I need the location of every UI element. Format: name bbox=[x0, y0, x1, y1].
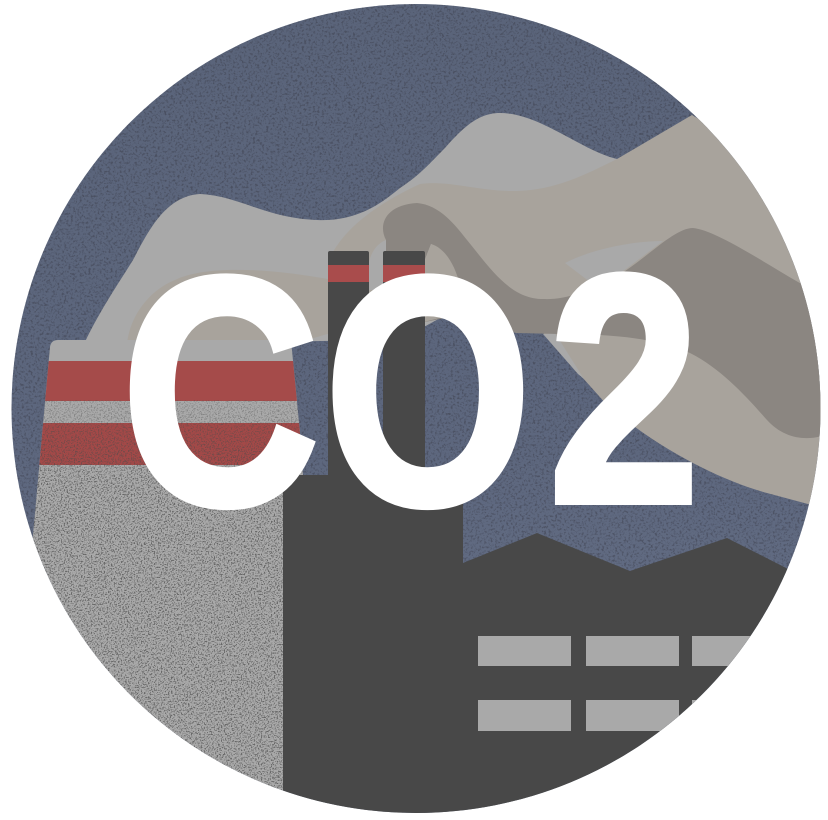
factory windows bbox=[478, 636, 750, 731]
title: CO2: C bbox=[121, 209, 320, 573]
chimney right bbox=[383, 251, 425, 476]
factory building bbox=[283, 251, 828, 820]
tower red bands bbox=[39, 361, 300, 465]
cooling tower bbox=[32, 340, 303, 790]
title: CO2: 2 bbox=[548, 206, 700, 571]
chimney left bbox=[328, 251, 369, 476]
title: CO2 bbox=[121, 206, 700, 574]
smoke plume bbox=[85, 113, 828, 510]
title: CO2: O bbox=[324, 210, 532, 574]
